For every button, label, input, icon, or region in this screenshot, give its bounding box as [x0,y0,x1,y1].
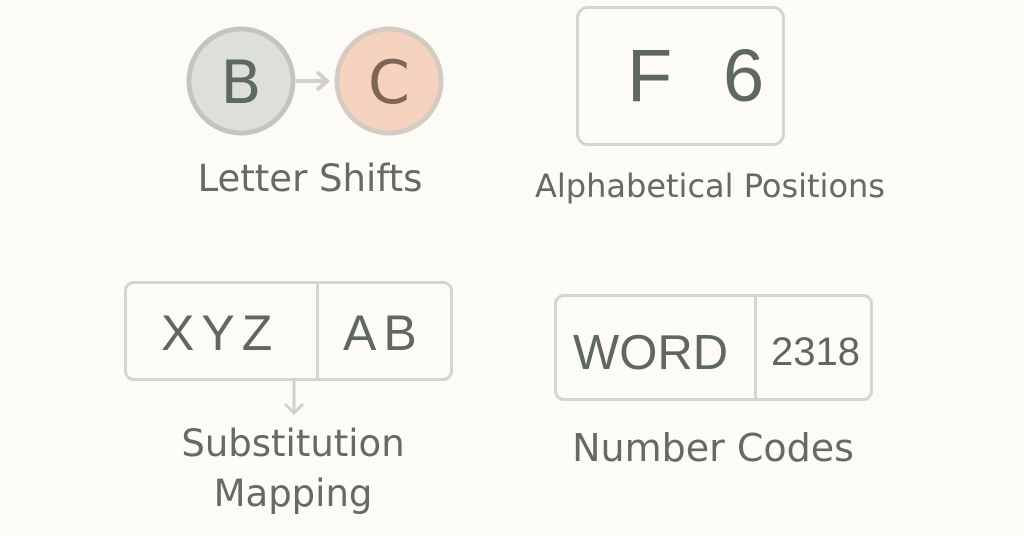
label: Letter Shifts: Letter Shifts [198,157,422,200]
box XYZ AB: AB [343,305,424,361]
box XYZ AB: XYZ [161,305,279,361]
box F 6: 6 [723,34,764,117]
icon: circles B to C [186,26,444,136]
label: Substitution Mapping: Substitution [181,422,405,465]
panel: alphabetical positions [535,6,885,205]
label: Substitution Mapping: Mapping [214,472,372,515]
label: Number Codes: Number Codes [572,426,854,470]
arrow down [284,381,304,415]
box WORD 2318 [554,294,873,401]
panel: substitution mapping [124,281,453,515]
box F 6: F [627,34,672,117]
box WORD 2318: WORD [573,326,728,380]
icon: circles B to C: C [368,48,410,118]
icon: circles B to C: B [220,48,262,118]
box WORD 2318: 2318 [771,330,860,374]
label: Substitution Mapping [181,422,405,515]
panel: letter shifts [186,26,444,200]
box XYZ AB [124,281,453,381]
box F 6 [576,6,785,146]
label: Alphabetical Positions: Alphabetical Positions [535,167,885,205]
panel: number codes [554,294,873,470]
